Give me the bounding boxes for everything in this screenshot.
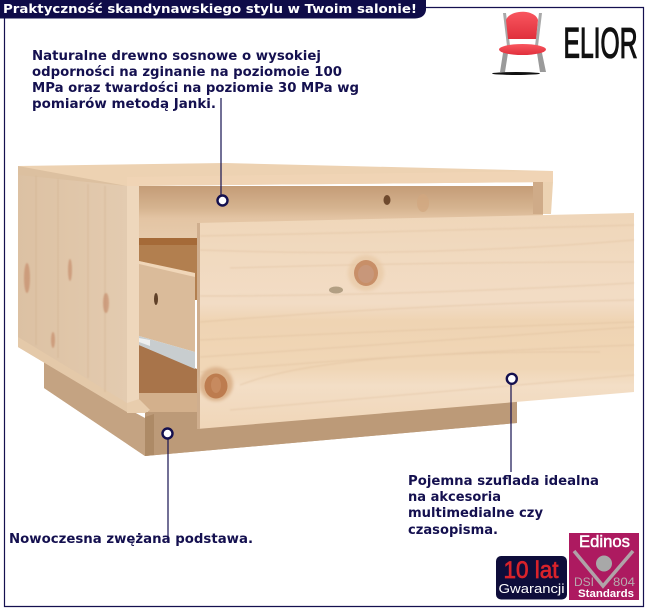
- text block: wood properties: Naturalne drewno sosnowe o wysokiej: [32, 49, 321, 64]
- plinth base: [44, 362, 517, 456]
- badge: 10 year warranty: 10 lat: [504, 557, 559, 584]
- text block: base: Nowoczesna zwężana podstawa.: [9, 532, 253, 547]
- callout: top line and marker: [218, 98, 228, 206]
- icon: red chair logo: [492, 12, 546, 75]
- text block: drawer: multimedialne czy: [408, 506, 544, 521]
- badge: Edinos standards: 804: [613, 575, 635, 589]
- badge: Edinos standards: DSI: [574, 575, 594, 589]
- badge: Edinos standards: [569, 532, 639, 600]
- open drawer side with runner: [139, 261, 195, 369]
- text block: wood properties: [32, 49, 359, 112]
- text block: wood properties: odporności na zginanie na poziomoie 100: [32, 65, 342, 80]
- text block: drawer: na akcesoria: [408, 490, 501, 505]
- callout: base line and marker: [162, 428, 172, 538]
- side panel: [18, 166, 127, 412]
- text block: wood properties: MPa oraz twardości na poziomie 30 MPa wg: [32, 81, 359, 96]
- cabinet opening: [127, 177, 543, 413]
- badge: 10 year warranty: [496, 556, 567, 600]
- text block: drawer: [408, 474, 599, 538]
- text block: drawer: Pojemna szuflada idealna: [408, 474, 599, 489]
- furniture photo: pine bedside table: [18, 163, 634, 456]
- callout: drawer line and marker: [507, 374, 517, 472]
- text block: wood properties: pomiarów metodą Janki.: [32, 97, 216, 112]
- text block: drawer: czasopisma.: [408, 523, 498, 538]
- drawer front: [197, 213, 634, 429]
- badge: 10 year warranty: Gwarancji: [498, 581, 565, 596]
- tabletop edge and top: [18, 163, 553, 214]
- wood knots: [199, 255, 384, 401]
- badge: Edinos standards: Edinos: [579, 532, 630, 551]
- title banner: Praktyczność skandynawskiego stylu w Twoim salonie!: [3, 1, 417, 16]
- badge: Edinos standards: Standards: [578, 588, 634, 600]
